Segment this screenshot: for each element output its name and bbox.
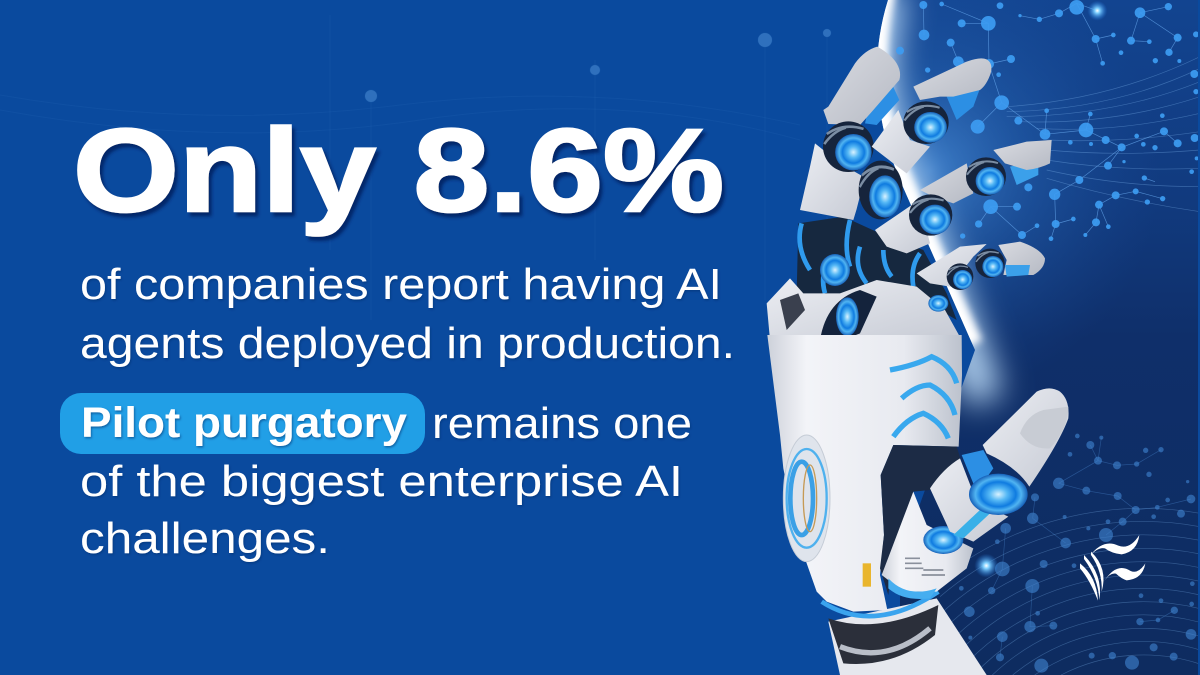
network: lower [940,434,1200,675]
robot hand: fingers [767,47,1052,340]
upper palm [767,278,962,340]
hand body [767,335,962,612]
right navy panel with sphere [860,0,1200,675]
robot arm and thumb [767,335,1145,675]
highlighted label: Pilot purgatory [81,399,407,447]
forearm lower [828,598,987,675]
thumb joint upper [962,450,993,492]
highlight pill [60,393,425,454]
headline: Only 8.6% [73,105,724,237]
finger 3 [875,140,1052,253]
thumb lower [882,492,973,592]
thumb tip [983,388,1069,487]
blue vents [890,357,957,438]
text block: challenge description: challenges. [80,514,330,563]
wrist dark band [828,605,938,664]
text block: challenge description [80,399,692,563]
network: upper [896,0,1200,241]
text block: challenge description: remains one [432,399,692,448]
inner dark wrist gap [880,445,963,595]
text block: stat description: of companies report having AI [80,260,722,309]
wrist blue ring [822,592,938,616]
right edge strip [1198,0,1200,675]
logo [1080,535,1145,601]
text block: stat description: agents deployed in production. [80,319,735,368]
text block: stat description [80,260,735,368]
text block: challenge description: of the biggest enterprise AI [80,457,683,506]
finger 4 [917,242,1045,290]
palm knuckle mechanics [797,217,957,333]
background: faint left waves and nodes [0,15,831,320]
thumb middle [930,458,1008,542]
circular side panel [783,435,830,562]
yellow chip [863,563,871,587]
finger 2 [872,58,991,173]
thumb joint lower [923,526,963,554]
finger 1 [800,47,903,220]
